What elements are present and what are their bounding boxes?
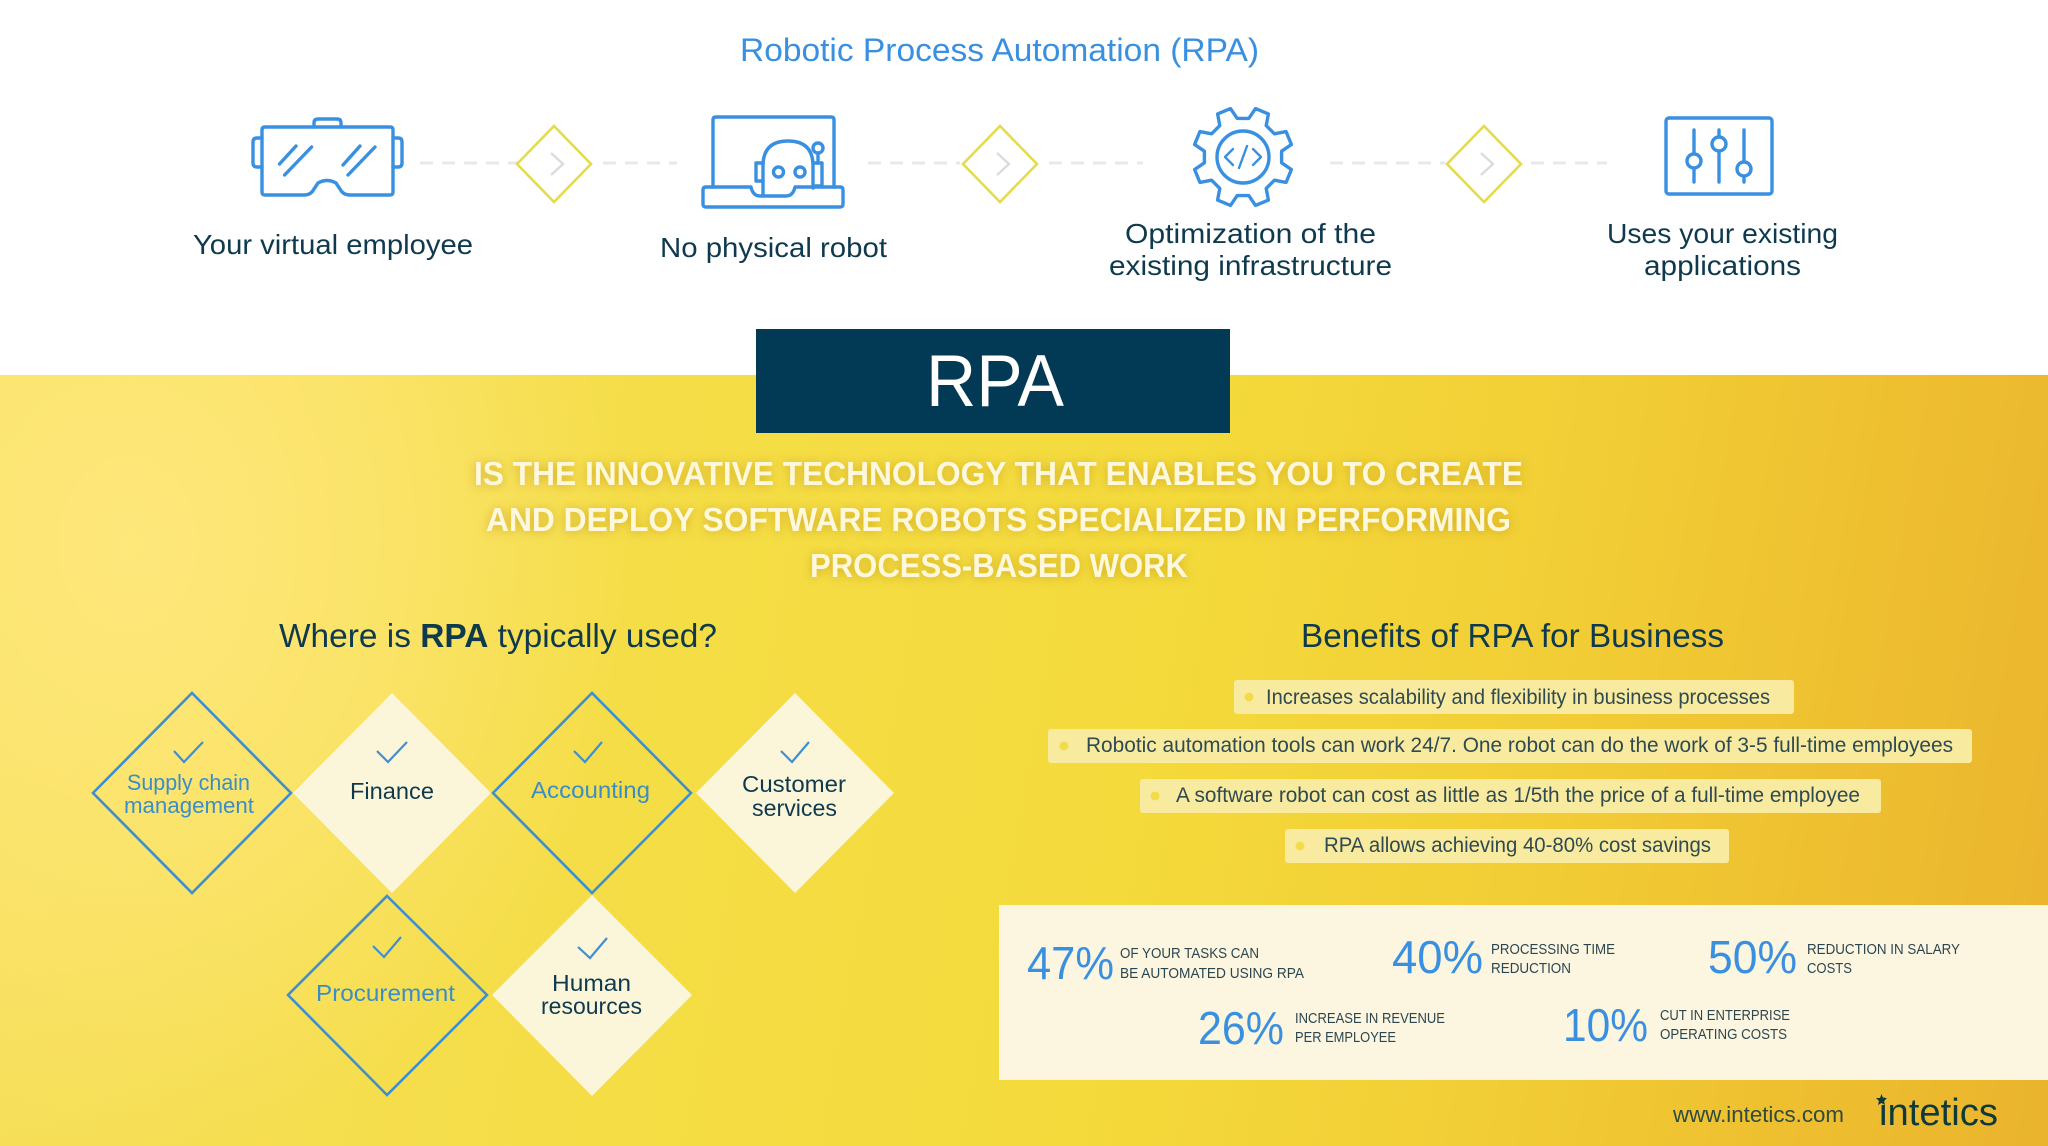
logo: intetics: intetics	[1879, 1092, 1998, 1134]
RPA banner	[756, 329, 1230, 433]
headline statement	[474, 455, 1523, 584]
stat: 40%: REDUCTION	[1491, 961, 1571, 977]
arrow diamond 3	[1447, 126, 1521, 202]
diamond: procurement	[288, 896, 487, 1095]
diamond: supply chain management: management	[124, 793, 255, 818]
panel: benefits list	[1048, 680, 1972, 863]
diamond: human resources: resources	[541, 993, 642, 1019]
label: no physical robot: No physical robot	[660, 232, 887, 263]
label: uses your existing applications: applications	[1644, 250, 1801, 281]
website url: www.intetics.com	[1672, 1102, 1844, 1127]
stat: 10%: OPERATING COSTS	[1660, 1027, 1787, 1043]
stat: 26%: 26%	[1198, 1002, 1284, 1054]
diamond: human resources	[492, 895, 692, 1096]
stat: 10%: 10%	[1563, 999, 1648, 1051]
stat: 47%	[1027, 937, 1304, 989]
arrow diamond 1	[517, 126, 591, 202]
heading: benefits of RPA for business: Benefits of RPA for Business	[1301, 617, 1724, 654]
diamond: accounting: Accounting	[531, 777, 650, 803]
stat: 50%: REDUCTION IN SALARY	[1807, 942, 1960, 958]
stat: 47%: 47%	[1027, 937, 1114, 989]
stat: 50%: 50%	[1708, 931, 1797, 983]
benefit: cost savings	[1285, 829, 1729, 863]
icon: gear with code	[1195, 109, 1291, 205]
stat: 26%: PER EMPLOYEE	[1295, 1030, 1396, 1046]
arrow diamond 2	[963, 126, 1037, 202]
label: uses your existing applications: Uses your existing	[1607, 218, 1838, 249]
diamond: supply chain management	[93, 693, 291, 893]
diamond: procurement: Procurement	[316, 980, 456, 1006]
diamond: supply chain management: Supply chain	[127, 770, 250, 795]
diamond: customer services: services	[752, 795, 837, 821]
heading: where is RPA typically used: Where is RPA typically used?	[279, 617, 717, 654]
benefit: scalability	[1234, 680, 1794, 714]
diamond: customer services	[696, 693, 894, 893]
stat: 26%: INCREASE IN REVENUE	[1295, 1011, 1445, 1027]
icon: VR headset	[253, 119, 402, 195]
diamond: finance	[293, 693, 491, 893]
RPA banner: RPA	[926, 341, 1064, 422]
benefit: cost savings: RPA allows achieving 40-80% cost savings	[1324, 834, 1711, 857]
diamond: human resources: Human	[552, 970, 631, 996]
headline statement: IS THE INNOVATIVE TECHNOLOGY THAT ENABLES YOU TO CREATE	[474, 455, 1523, 492]
stat: 40%: 40%	[1392, 931, 1483, 983]
stat: 26%	[1198, 1002, 1445, 1054]
stat: 10%	[1563, 999, 1790, 1051]
connector dashes	[420, 162, 1607, 164]
icon: laptop with robot	[703, 117, 843, 207]
label: your virtual employee: Your virtual employee	[193, 229, 473, 260]
headline statement: AND DEPLOY SOFTWARE ROBOTS SPECIALIZED IN PERFORMING	[486, 501, 1511, 538]
panel: use cases diamonds	[93, 693, 894, 1096]
label: uses your existing applications	[1607, 218, 1838, 281]
benefit: cost of a software robot: A software robot can cost as little as 1/5th the price of a full-time employee	[1176, 784, 1860, 807]
benefit: cost of a software robot	[1140, 779, 1881, 813]
stat: 10%: CUT IN ENTERPRISE	[1660, 1008, 1790, 1024]
label: optimization of the existing infrastructure: existing infrastructure	[1109, 250, 1392, 281]
stat: 50%: COSTS	[1807, 961, 1852, 977]
stat: 40%: PROCESSING TIME	[1491, 942, 1615, 958]
panel: statistics	[999, 905, 2048, 1080]
benefit: 24/7 work: Robotic automation tools can work 24/7. One robot can do the work of 3-5 full-time employees	[1086, 734, 1953, 757]
stat: 50%	[1708, 931, 1960, 983]
diamond: accounting	[493, 693, 691, 893]
stat: 40%	[1392, 931, 1615, 983]
label: optimization of the existing infrastructure: Optimization of the	[1125, 218, 1376, 249]
benefit: 24/7 work	[1048, 729, 1972, 763]
label: optimization of the existing infrastructure	[1109, 218, 1392, 281]
icon: sliders	[1666, 118, 1772, 194]
headline statement: PROCESS-BASED WORK	[810, 547, 1188, 584]
stat: 47%: BE AUTOMATED USING RPA	[1120, 966, 1304, 982]
title: Robotic Process Automation (RPA)	[740, 32, 1259, 68]
diamond: finance: Finance	[350, 778, 434, 804]
diamond: customer services: Customer	[742, 771, 846, 797]
stat: 47%: OF YOUR TASKS CAN	[1120, 946, 1259, 962]
benefit: scalability: Increases scalability and flexibility in business processes	[1266, 686, 1770, 709]
